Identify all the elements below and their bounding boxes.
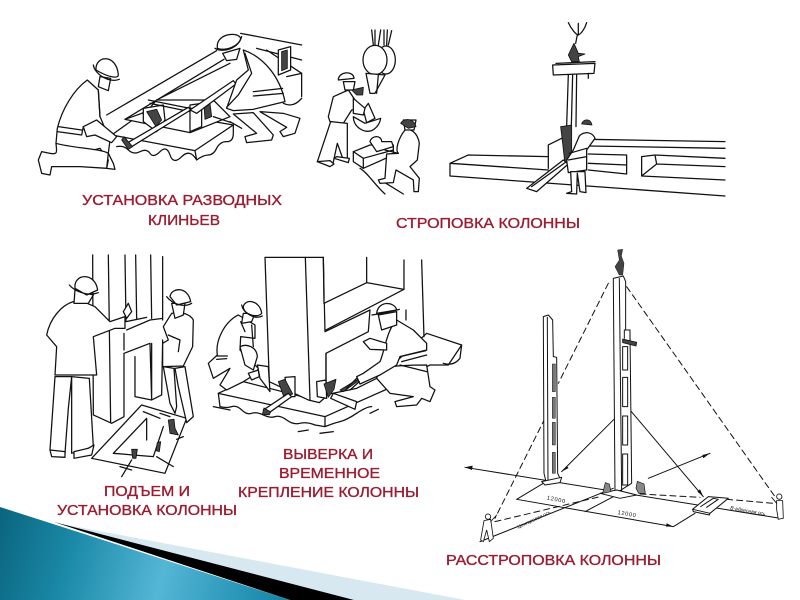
worker: left surveyor (481, 514, 497, 542)
worker: right surveyor (772, 494, 783, 519)
worker: crouching with block (353, 120, 419, 194)
caption: slinging: СТРОПОВКА КОЛОННЫ (396, 215, 580, 232)
caption: alignment: ВЫВЕРКА И (283, 446, 373, 463)
caption: alignment (238, 446, 419, 501)
caption: releasing: РАССТРОПОВКА КОЛОННЫ (446, 552, 661, 569)
axes and dimensions: Центровая ось (517, 510, 552, 530)
foundation (213, 333, 462, 433)
illustration: releasing the sling (465, 249, 783, 542)
column base with workers (600, 481, 645, 498)
axes and dimensions: В-адресная ось (730, 505, 766, 518)
column (265, 257, 424, 403)
beam and foundation (450, 125, 725, 196)
caption: installing wedges: УСТАНОВКА РАЗВОДНЫХ (82, 192, 282, 209)
caption: installing wedges (82, 192, 282, 229)
worker: left (38, 59, 119, 175)
worker: standing (317, 73, 365, 167)
foundation plate (693, 497, 728, 515)
column: left (542, 315, 562, 485)
caption: lifting (57, 483, 237, 519)
wedges and braces (257, 365, 359, 415)
worker: small (163, 290, 193, 423)
foundation frame (92, 405, 187, 477)
illustration: lifting and installing the column (47, 255, 193, 477)
lifting hook (553, 23, 595, 127)
caption: installing wedges: КЛИНЬЕВ (148, 212, 220, 229)
worker: at column base (567, 120, 595, 194)
illustration: alignment and temporary fixing (208, 257, 462, 433)
axes and dimensions (465, 453, 780, 542)
sling (353, 30, 395, 131)
axes and dimensions: 12000 (617, 510, 637, 519)
column (93, 255, 163, 423)
worker: right (215, 34, 300, 143)
illustration: installing wedges (38, 33, 302, 175)
worker: right crouching (347, 304, 435, 407)
axes and dimensions: 12000 (546, 495, 566, 505)
illustration: slinging the column, ground crew (317, 23, 725, 196)
corner decoration (0, 507, 465, 600)
column: center (613, 249, 637, 492)
caption: lifting: УСТАНОВКА КОЛОННЫ (57, 502, 237, 519)
caption: lifting: ПОДЪЕМ И (104, 483, 190, 500)
worker: left crouching (208, 302, 262, 390)
caption: alignment: КРЕПЛЕНИЕ КОЛОННЫ (238, 484, 419, 501)
worker: large (47, 277, 132, 458)
guy lines and sight lines (495, 283, 775, 522)
caption: alignment: ВРЕМЕННОЕ (279, 465, 380, 482)
